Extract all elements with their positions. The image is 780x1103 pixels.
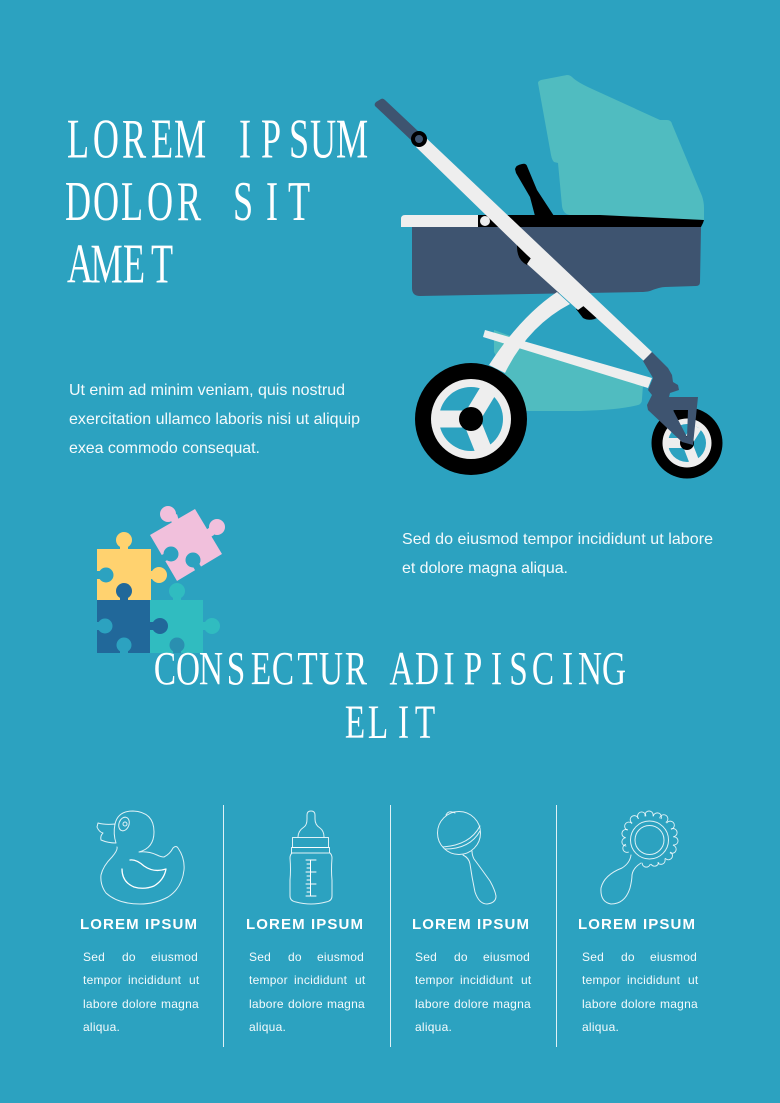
column 3 text: dolore <box>454 997 489 1011</box>
column 3 text: incididunt <box>460 973 514 987</box>
column 2 text: tempor <box>249 973 288 987</box>
large wheel <box>415 363 527 475</box>
column 1 text: aliqua. <box>83 1020 120 1034</box>
column 3 text: ut <box>521 973 532 987</box>
column 2 text: ut <box>355 973 366 987</box>
stroller lower basket <box>494 330 643 411</box>
column 4 text: dolore <box>621 997 656 1011</box>
illustration: puzzle pieces <box>97 506 225 653</box>
teal puzzle piece <box>150 583 220 653</box>
column 4 text: ut <box>688 973 699 987</box>
column 2 text: aliqua. <box>249 1020 286 1034</box>
column 1 text: magna <box>161 997 199 1011</box>
column 3 text: magna <box>493 997 531 1011</box>
column 2 text: do <box>288 950 302 964</box>
intro text block: exea commodo consequat. <box>69 440 260 457</box>
column 1 text: dolore <box>122 997 157 1011</box>
secondary text block: Sed do eiusmod tempor incididunt ut labore <box>402 531 713 548</box>
column 4 text: tempor <box>582 973 621 987</box>
black hinge <box>517 240 535 265</box>
stroller secondary bar <box>527 255 592 310</box>
column 1 text <box>80 916 200 1034</box>
stroller carriage body <box>412 227 701 296</box>
column 2 text: Sed <box>249 950 271 964</box>
column 4 text: Sed <box>582 950 604 964</box>
column 3 text: aliqua. <box>415 1020 452 1034</box>
column 3 text: tempor <box>415 973 454 987</box>
title: AMET <box>67 234 173 296</box>
column 4 text: magna <box>660 997 698 1011</box>
column 1 text: incididunt <box>128 973 182 987</box>
column 2 text: LOREM IPSUM <box>246 916 363 933</box>
handle joint <box>413 133 425 145</box>
column 4 text: eiusmod <box>650 950 697 964</box>
column 2 text: labore <box>249 997 284 1011</box>
column 4 text: LOREM IPSUM <box>578 916 695 933</box>
secondary text block: et dolore magna aliqua. <box>402 560 568 577</box>
column 3 text: Sed <box>415 950 437 964</box>
illustration: stroller <box>375 75 722 478</box>
column 2 text: eiusmod <box>317 950 364 964</box>
dark blue puzzle piece <box>97 583 150 653</box>
icon: baby bottle <box>290 811 332 904</box>
column 4 text: do <box>621 950 635 964</box>
column 4 text <box>578 916 699 1034</box>
title <box>65 109 368 296</box>
column 1 text: do <box>122 950 136 964</box>
stroller fork <box>643 352 698 445</box>
section heading: ELIT <box>345 695 435 748</box>
icon: rattle <box>438 812 496 904</box>
column 4 text: labore <box>582 997 617 1011</box>
column 1 text: LOREM IPSUM <box>80 916 197 933</box>
column 4 text: aliqua. <box>582 1020 619 1034</box>
icon: ring rattle <box>601 811 678 904</box>
secondary text block <box>402 531 713 577</box>
stroller canopy <box>538 75 704 220</box>
column 2 text: incididunt <box>294 973 348 987</box>
column 2 text: magna <box>327 997 365 1011</box>
yellow puzzle piece <box>97 532 167 600</box>
divider <box>224 805 556 1047</box>
column 3 text: labore <box>415 997 450 1011</box>
stroller frame arc <box>489 292 570 373</box>
stroller main bar <box>416 135 652 361</box>
column 1 text: labore <box>83 997 118 1011</box>
column 2 text: dolore <box>288 997 323 1011</box>
column 3 text <box>412 916 532 1034</box>
column 3 text: do <box>454 950 468 964</box>
column 1 text: Sed <box>83 950 105 964</box>
intro text block: exercitation ullamco laboris nisi ut aliquip <box>69 411 360 428</box>
intro text block <box>69 382 360 457</box>
stroller push handle <box>375 99 419 141</box>
pink puzzle piece <box>150 506 225 581</box>
column 4 text: incididunt <box>627 973 681 987</box>
column 1 text: eiusmod <box>151 950 198 964</box>
title: DOLOR SIT <box>65 171 310 233</box>
stroller cross bar <box>483 330 652 388</box>
stroller carriage rim <box>478 215 704 227</box>
icon: rubber duck <box>97 811 184 904</box>
small wheel <box>652 408 722 478</box>
stroller seat handle <box>515 164 554 216</box>
section heading <box>154 642 626 748</box>
column 3 text: LOREM IPSUM <box>412 916 529 933</box>
column 2 text <box>246 916 366 1034</box>
section heading: CONSECTUR ADIPISCING <box>154 642 626 695</box>
column 1 text: tempor <box>83 973 122 987</box>
column 3 text: eiusmod <box>483 950 530 964</box>
column 1 text: ut <box>189 973 200 987</box>
title: LOREM IPSUM <box>67 109 368 171</box>
intro text block: Ut enim ad minim veniam, quis nostrud <box>69 382 345 399</box>
